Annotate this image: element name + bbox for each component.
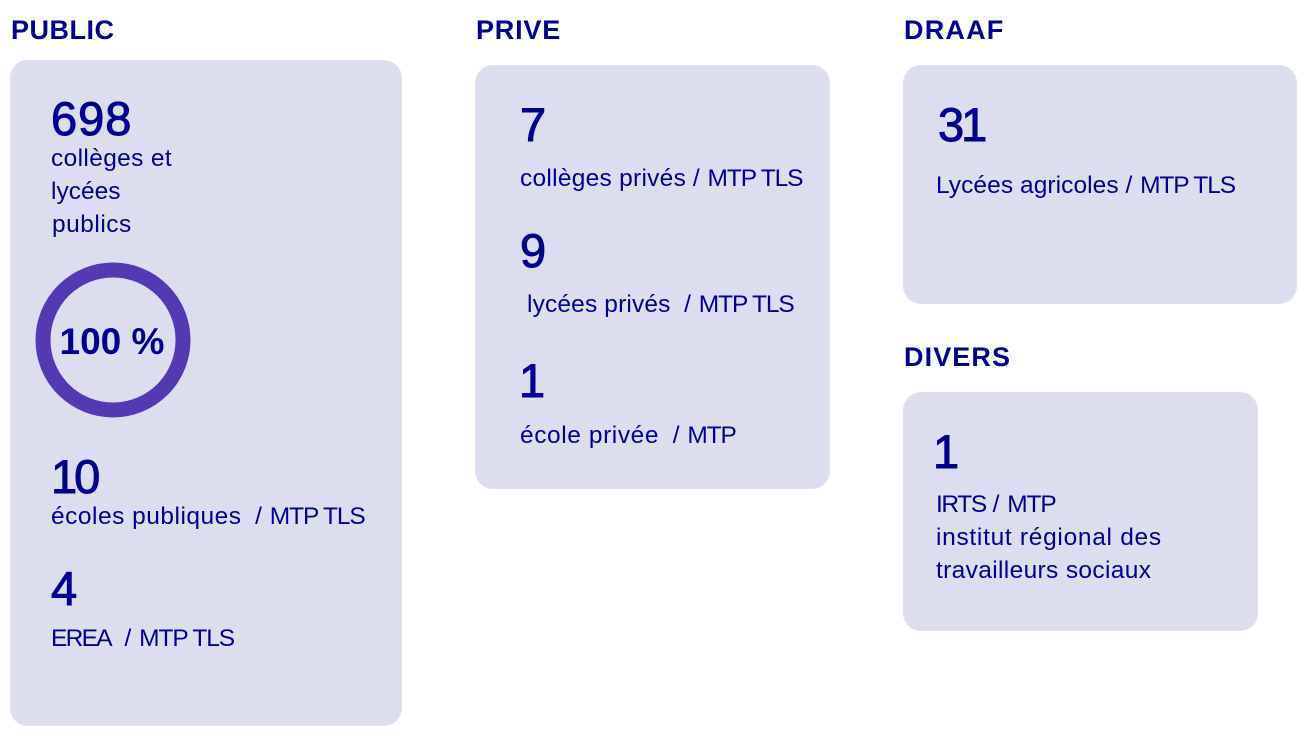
panel: prive [475,65,830,489]
panel: divers [903,392,1258,631]
number: 10: 10 [51,450,97,503]
text: EREA: EREA / MTP TLS [51,625,234,652]
number: 31: 31 [938,98,984,151]
text: lycées privés: lycées privés / MTP TLS [527,291,794,318]
heading: DIVERS: DIVERS [904,342,1011,372]
text: Lycées agricoles: Lycées agricoles / MTP TLS [936,172,1235,199]
donut chart: 100 % [36,262,190,418]
number: 4: 4 [51,562,77,615]
text: IRTS: travailleurs sociaux [936,557,1151,584]
text: école privée: école privée / MTP [520,422,736,449]
number: 698: 698 [51,92,132,145]
text: collèges et lycées publics: collèges et [51,145,172,172]
number: 7: 7 [520,98,546,151]
heading: PUBLIC: PUBLIC [11,15,114,45]
heading: PRIVE: PRIVE [476,15,561,45]
text: collèges privés: collèges privés / MTP TLS [520,165,802,192]
text: IRTS: IRTS / MTP [936,491,1056,518]
text: IRTS [936,491,1162,584]
heading: DRAAF: DRAAF [904,15,1004,45]
panel: public [10,60,402,726]
text: collèges et lycées publics: publics [52,211,132,238]
panel: draaf [903,65,1297,304]
text: collèges et lycées publics: lycées [51,178,120,205]
text: écoles publiques: écoles publiques / MTP TLS [51,503,365,530]
number: 1: 1 [933,425,959,478]
text: IRTS: institut régional des [936,524,1162,551]
number: 1: 1 [519,354,545,407]
donut chart: 100 %: 100 % [60,321,164,362]
text: collèges et lycées publics [51,145,172,238]
number: 9: 9 [520,224,546,277]
